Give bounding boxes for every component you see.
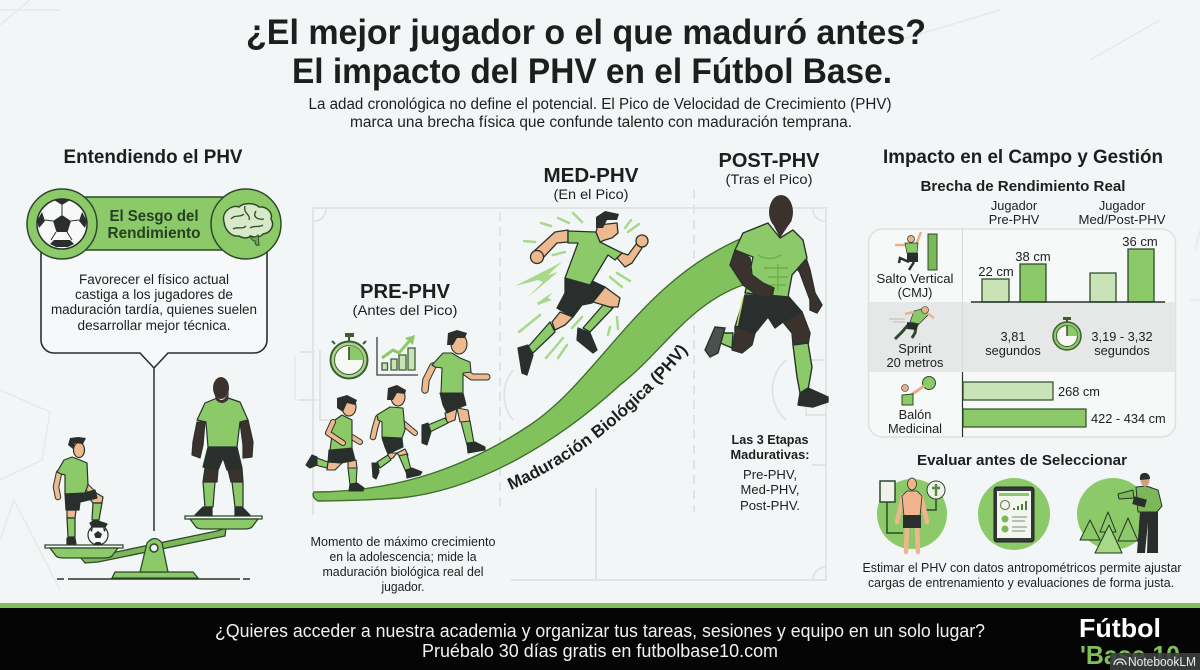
logo: Fútbol — [1079, 613, 1161, 643]
heading: pre-phv: (Antes del Pico) — [352, 302, 458, 318]
heading: pre-phv: PRE-PHV — [360, 280, 450, 303]
player: young on scale — [56, 437, 107, 544]
heading: impacto: Impacto en el Campo y Gestión — [883, 146, 1163, 168]
text: sprint times post-phv: segundos — [1094, 343, 1150, 358]
column headers: Med/Post-PHV — [1078, 212, 1166, 227]
subheading: brecha: Brecha de Rendimiento Real — [920, 179, 1126, 195]
text: las 3 etapas — [730, 432, 810, 513]
text: sprint times pre-phv — [985, 329, 1041, 358]
label: salto vertical: (CMJ) — [898, 285, 932, 300]
subtitle — [308, 96, 892, 131]
text: PHV definition — [310, 534, 496, 594]
text: evaluar description — [862, 561, 1182, 590]
subtitle: La adad cronológica no define el potencial. El Pico de Velocidad de Crecimiento (PHV) — [308, 96, 892, 113]
chart: balón medicinal: 422 - 434 cm — [1091, 411, 1166, 426]
heading: post-phv: POST-PHV — [718, 149, 820, 172]
player: pre-phv large — [422, 330, 487, 453]
pitch lines — [300, 190, 826, 580]
text: las 3 etapas: Med-PHV, — [740, 482, 800, 497]
label: balón medicinal: Medicinal — [888, 421, 942, 436]
text: las 3 etapas: Post-PHV. — [740, 498, 800, 513]
player: mature on scale — [192, 377, 253, 516]
column headers: Jugador — [1099, 198, 1146, 213]
label: sprint: 20 metros — [887, 355, 943, 370]
comparison table — [868, 229, 1176, 437]
text: las 3 etapas: Madurativas: — [730, 447, 810, 462]
column headers — [989, 198, 1166, 227]
icon: jumper and ruler — [895, 232, 937, 270]
icon: sprint stopwatch — [1053, 317, 1081, 350]
icon: cones and coach — [1077, 473, 1162, 553]
text: sesgo description: desarrollar mejor técnica. — [78, 318, 230, 333]
badge: notebooklm — [1110, 653, 1200, 670]
logo — [1079, 613, 1180, 670]
icon: medicine ball thrower — [902, 376, 936, 405]
column headers: Jugador — [991, 198, 1038, 213]
text: sprint times pre-phv: segundos — [985, 343, 1041, 358]
small ball — [88, 525, 108, 545]
logo: 'Base 10 — [1080, 640, 1180, 670]
heading: pre-phv — [352, 280, 458, 318]
chart: salto vertical: 22 cm — [978, 264, 1014, 279]
panel: growth curve — [306, 149, 829, 594]
panel: impacto en el campo — [862, 146, 1182, 590]
banner: el sesgo del rendimiento — [62, 197, 246, 250]
heading: post-phv: (Tras el Pico) — [726, 171, 812, 187]
text: sesgo description — [51, 272, 257, 333]
chart: balón medicinal: 268 cm — [1058, 384, 1100, 399]
banner: el sesgo del rendimiento: El Sesgo del — [110, 208, 198, 225]
heading: evaluar: Evaluar antes de Seleccionar — [917, 453, 1127, 469]
heading: med-phv — [544, 164, 639, 202]
chart: salto vertical — [971, 234, 1165, 302]
player: pre-phv small — [306, 395, 364, 491]
text: sesgo description: castiga a los jugadores de — [75, 287, 233, 302]
player: post-phv — [705, 195, 828, 407]
callout box with tail — [41, 250, 267, 368]
title: El impacto del PHV en el Fútbol Base. — [292, 51, 892, 91]
heading: post-phv — [718, 149, 820, 187]
curve label: Maduración Biológica (PHV) — [507, 345, 689, 490]
footer band — [0, 603, 1200, 670]
title: ¿El mejor jugador o el que maduró antes? — [246, 12, 926, 52]
text: sesgo description: Favorecer el físico actual — [79, 272, 229, 287]
chart: balón medicinal — [963, 382, 1166, 427]
title — [246, 12, 926, 91]
chart: salto vertical: 36 cm — [1122, 234, 1158, 249]
text: las 3 etapas: Las 3 Etapas — [732, 432, 808, 447]
subtitle: marca una brecha física que confunde talento con maduración temprana. — [350, 114, 852, 131]
label: salto vertical — [876, 271, 954, 300]
text: las 3 etapas: Pre-PHV, — [743, 467, 797, 482]
banner: el sesgo del rendimiento: Rendimiento — [108, 225, 200, 242]
icon: rising bar chart — [377, 335, 418, 375]
badge: notebooklm: NotebookLM — [1128, 655, 1196, 669]
text: sprint times post-phv — [1091, 329, 1153, 358]
icon: brain — [211, 189, 281, 259]
curve: maduración biológica — [313, 237, 752, 501]
player: pre-phv medium — [372, 385, 422, 479]
text: evaluar description: Estimar el PHV con datos antropométricos permite ajustar — [862, 561, 1182, 575]
footer text: Pruébalo 30 días gratis en futbolbase10.com — [422, 640, 778, 661]
label: sprint — [887, 341, 943, 370]
heading: med-phv: MED-PHV — [544, 164, 639, 187]
text: PHV definition: jugador. — [381, 579, 424, 594]
label: sprint: Sprint — [898, 341, 932, 356]
column headers: Pre-PHV — [989, 212, 1040, 227]
energy bursts — [515, 213, 639, 358]
text: sprint times post-phv: 3,19 - 3,32 — [1091, 329, 1153, 344]
footer text: ¿Quieres acceder a nuestra academia y organizar tus tareas, sesiones y equipo en un solo lugar? — [215, 620, 985, 641]
label: balón medicinal: Balón — [899, 407, 931, 422]
icon: anthropometry — [877, 478, 947, 552]
footer text — [215, 620, 985, 661]
text: sprint times pre-phv: 3,81 — [1001, 329, 1025, 344]
label: balón medicinal — [888, 407, 942, 436]
player: med-phv — [518, 211, 648, 375]
heading: entendiendo el PHV: Entendiendo el PHV — [64, 147, 243, 168]
icon: tablet — [978, 478, 1050, 550]
text: sesgo description: maduración tardía, quienes suelen — [51, 302, 257, 317]
text: evaluar description: cargas de entrenamiento y evaluaciones de forma justa. — [868, 576, 1174, 590]
text: PHV definition: Momento de máximo crecimiento — [310, 534, 496, 549]
heading: med-phv: (En el Pico) — [554, 186, 628, 202]
icon: soccer ball — [27, 189, 97, 259]
chart: salto vertical: 38 cm — [1015, 249, 1051, 264]
text: PHV definition: en la adolescencia; mide la — [330, 549, 477, 564]
icon: stopwatch — [330, 333, 368, 378]
balance scale — [45, 368, 262, 579]
panel: entendiendo el PHV — [27, 147, 281, 579]
icon: sprinter — [889, 306, 934, 339]
text: PHV definition: maduración biológica real del — [322, 564, 484, 579]
label: salto vertical: Salto Vertical — [876, 271, 954, 286]
